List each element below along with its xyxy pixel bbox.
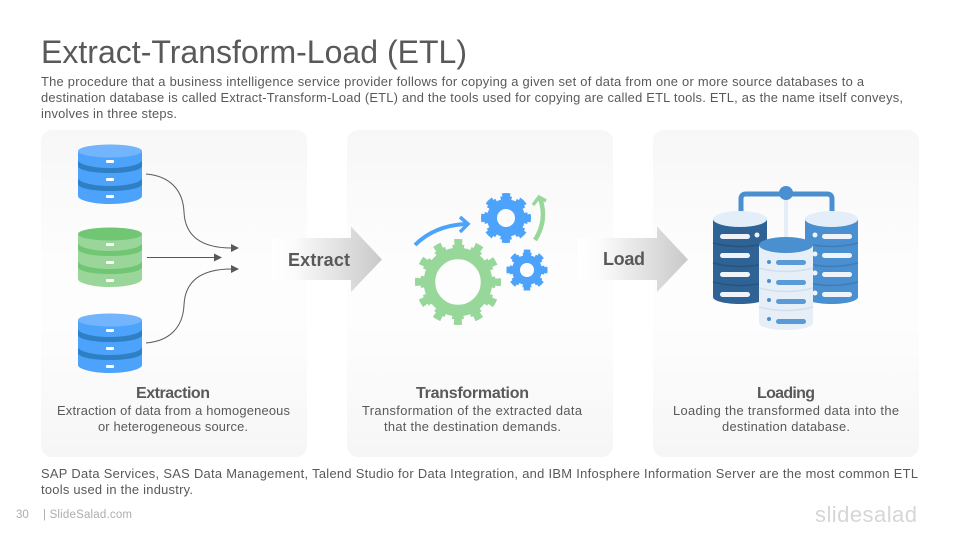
intro text: destination database is called Extract-Transform-Load (ETL) and the tools used for copying are called ETL tools. ETL, as the name itself conveys,	[41, 90, 903, 105]
heading: loading: Loading	[757, 385, 815, 402]
text: transformation description	[362, 403, 583, 434]
arrow: green curved	[533, 197, 546, 240]
icon: blue database bottom	[78, 314, 142, 373]
text: loading description: Loading the transformed data into the	[673, 403, 899, 418]
icon: blue gear bottom	[508, 251, 546, 289]
arrow: load	[578, 226, 688, 292]
heading: transformation: Transformation	[416, 385, 529, 402]
intro text: The procedure that a business intelligence service provider follows for copying a given set of data from one or more source databases to a	[41, 74, 865, 89]
arrows: sources converging	[146, 174, 239, 343]
panel: loading	[653, 130, 919, 457]
text: transformation description: Transformation of the extracted data	[362, 403, 583, 418]
text: extraction description	[57, 403, 290, 434]
heading: extraction: Extraction	[136, 385, 210, 402]
icon: light database	[759, 237, 813, 330]
text: transformation description: that the destination demands.	[384, 419, 561, 434]
icon: green database	[78, 228, 142, 287]
icon: database connector	[741, 186, 832, 244]
footer: page number and site: 30	[16, 509, 29, 521]
arrow: extract: Extract	[288, 250, 350, 270]
arrow: load: Load	[603, 249, 645, 269]
text: extraction description: Extraction of data from a homogeneous	[57, 403, 290, 418]
icon: blue database top	[78, 144, 142, 204]
panel: extraction	[41, 130, 307, 457]
icon: large green gear	[418, 242, 498, 322]
text: loading description	[673, 403, 899, 434]
arrow: blue curved	[415, 217, 468, 245]
closing text	[41, 466, 918, 497]
icon: blue gear top	[483, 195, 529, 241]
text: loading description: destination database.	[722, 419, 850, 434]
icon: dark database	[713, 211, 767, 304]
icon: blue database	[805, 211, 858, 304]
intro text: involves in three steps.	[41, 106, 177, 121]
logo: slidesalad: slidesalad	[815, 502, 917, 527]
text: extraction description: or heterogeneous source.	[98, 419, 248, 434]
title: Extract-Transform-Load (ETL)	[41, 34, 467, 70]
closing text: tools used in the industry.	[41, 482, 193, 497]
footer: page number and site: | SlideSalad.com	[43, 509, 132, 521]
panel: transformation	[347, 130, 613, 457]
closing text: SAP Data Services, SAS Data Management, Talend Studio for Data Integration, and IBM Infosphere Information Server are the most common ETL	[41, 466, 918, 481]
arrow: extract	[272, 226, 382, 292]
intro text	[41, 74, 903, 121]
